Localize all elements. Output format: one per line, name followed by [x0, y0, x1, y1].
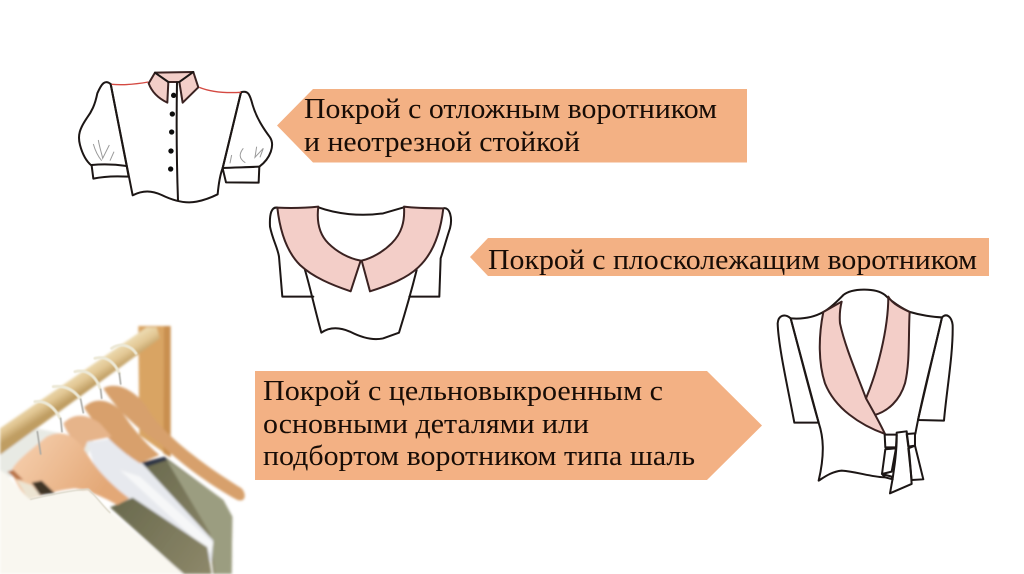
photo: wooden hangers with clothes on a rail — [0, 326, 245, 574]
photo backdrop — [0, 326, 245, 574]
banner: shawl collar — [255, 371, 762, 480]
illustration: blouse with turn-down collar — [79, 72, 272, 202]
banner: shawl collar: Покрой с цельновыкроенным с — [263, 376, 663, 407]
banner: turn-down collar: и неотрезной стойкой — [304, 127, 580, 158]
banner: flat collar: Покрой с плосколежащим воротником — [488, 245, 977, 276]
hanger hooks — [31, 345, 136, 513]
banner: shawl collar: подбортом воротником типа шаль — [263, 441, 695, 472]
banner: turn-down collar — [277, 89, 747, 162]
illustration: blouse with shawl collar — [778, 290, 953, 493]
banner: turn-down collar: Покрой с отложным воротником — [304, 94, 717, 125]
illustration: blouse with flat collar — [270, 207, 451, 339]
banner: shawl collar: основными деталями или — [263, 409, 589, 440]
